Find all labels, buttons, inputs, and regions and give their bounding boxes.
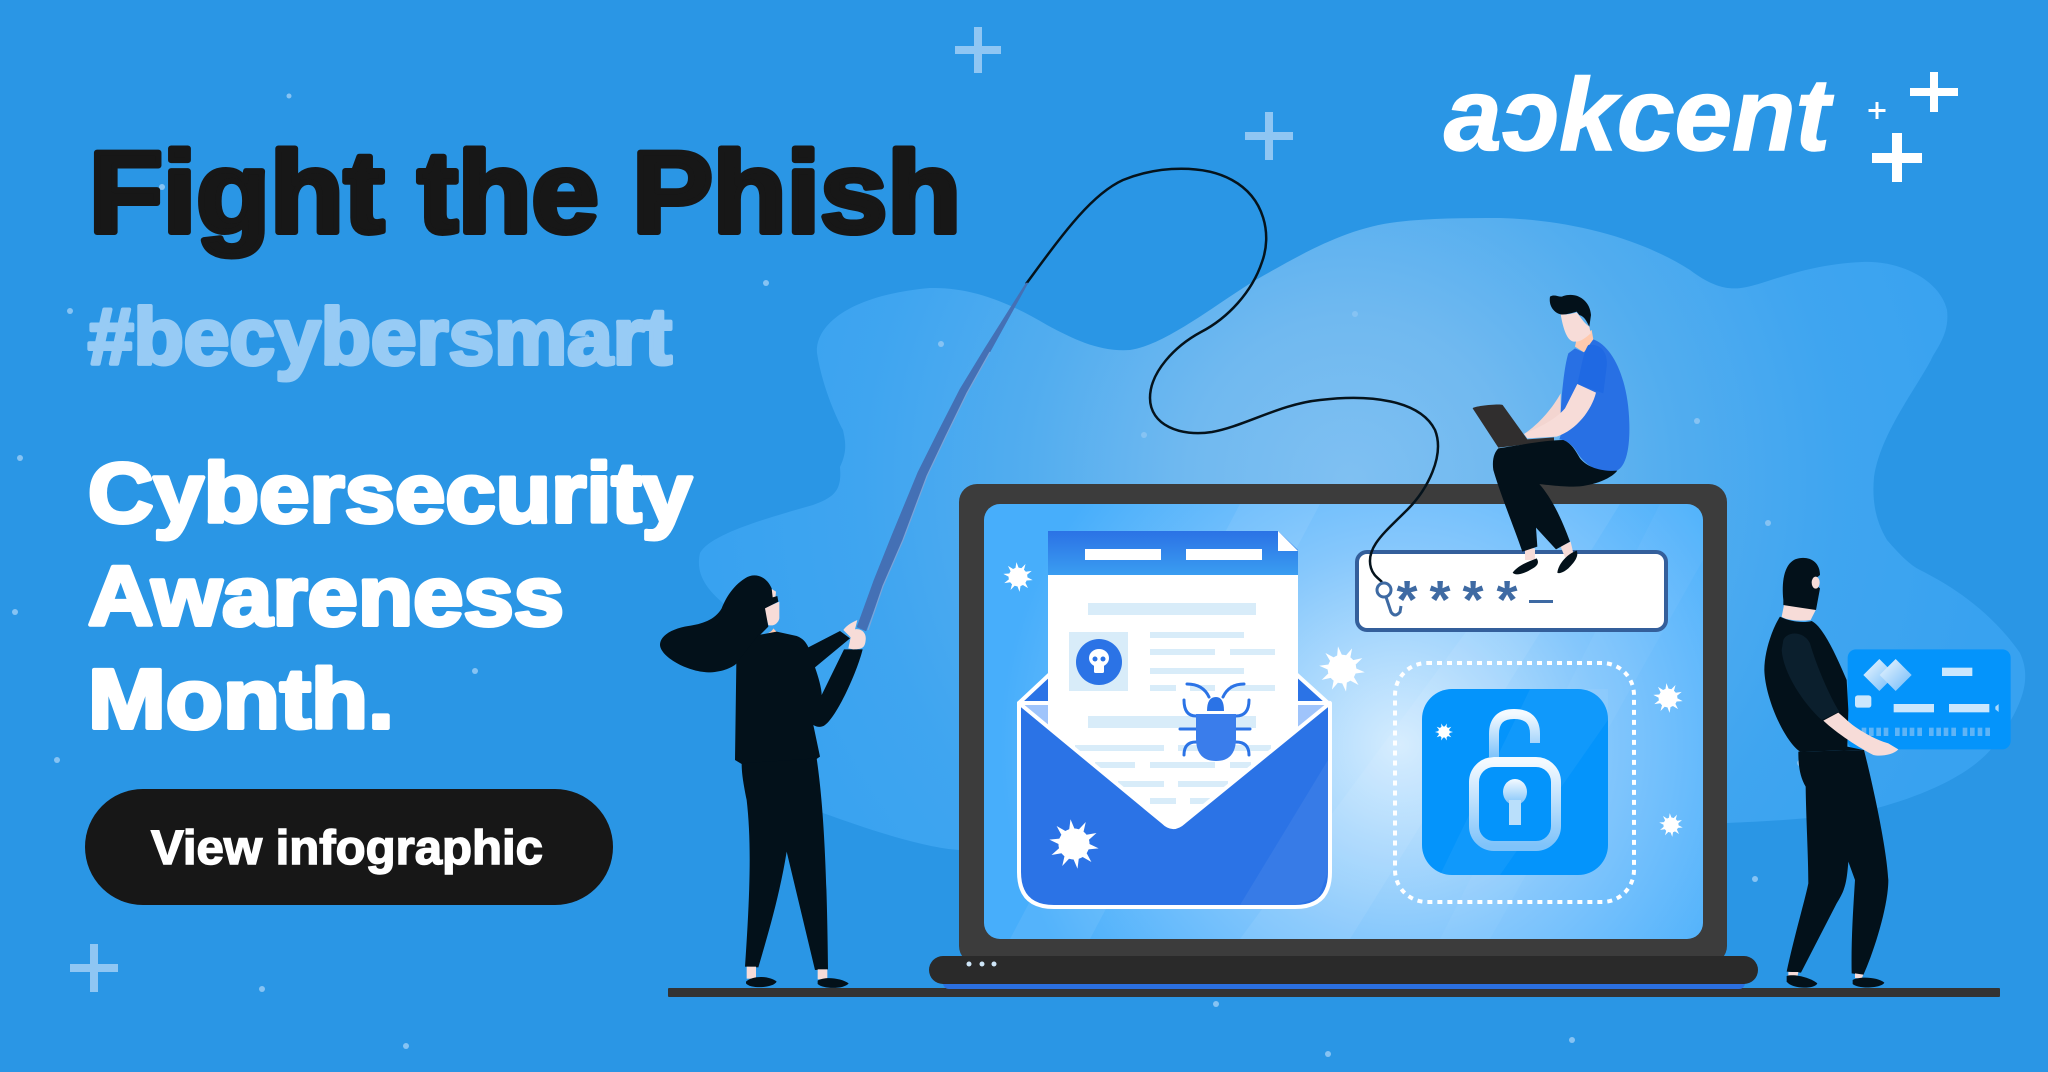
subtitle: Cybersecurity: [88, 446, 692, 540]
icon: open padlock: [1474, 714, 1556, 846]
pale plus: top centre: [955, 27, 1001, 73]
envelope front: [1019, 703, 1330, 907]
character: man with laptop: [1473, 295, 1629, 574]
background blob: [699, 218, 2025, 850]
laptop: [929, 484, 1758, 989]
fishing line: [1026, 169, 1438, 582]
icon: skull: [1076, 639, 1122, 685]
subtitle: Awareness: [88, 549, 564, 643]
document: [1048, 531, 1298, 830]
phishing email: [1019, 531, 1330, 907]
title: Fight the Phish: [89, 129, 961, 257]
password field: *: [1429, 570, 1451, 630]
logo: aɔkcent: [1444, 57, 1834, 172]
character: woman fishing: [660, 575, 866, 988]
pale plus: near logo: [1245, 112, 1293, 160]
laptop screen: [984, 504, 1703, 939]
password field: *: [1496, 570, 1518, 630]
password field: [1357, 552, 1666, 630]
pale plus: bottom left: [70, 944, 118, 992]
hashtag: #becybersmart: [88, 292, 672, 381]
subtitle: Month.: [88, 652, 394, 746]
laptop lid: [959, 484, 1727, 964]
button: view infographic: View infographic: [151, 822, 543, 875]
password field: *: [1462, 570, 1484, 630]
dotted frame: [1395, 663, 1634, 902]
password field: *: [1396, 570, 1418, 630]
credit card: [1848, 649, 2011, 749]
background sparkle dots: [12, 94, 1803, 1057]
subtitle: [88, 446, 692, 746]
spark on envelope: [1045, 816, 1103, 872]
button: view infographic: [85, 789, 613, 905]
sparks around the screen: [1000, 560, 1686, 839]
padlock panel: [1422, 689, 1608, 875]
laptop base: [943, 975, 1745, 989]
envelope back: [1019, 674, 1328, 703]
ground line: [668, 988, 2000, 997]
icon: bug: [1180, 684, 1250, 761]
fishing hook: [1377, 583, 1401, 615]
fishing rod: [857, 283, 1028, 631]
character: thief with credit card: [1764, 558, 2011, 988]
logo: [1444, 57, 1958, 182]
